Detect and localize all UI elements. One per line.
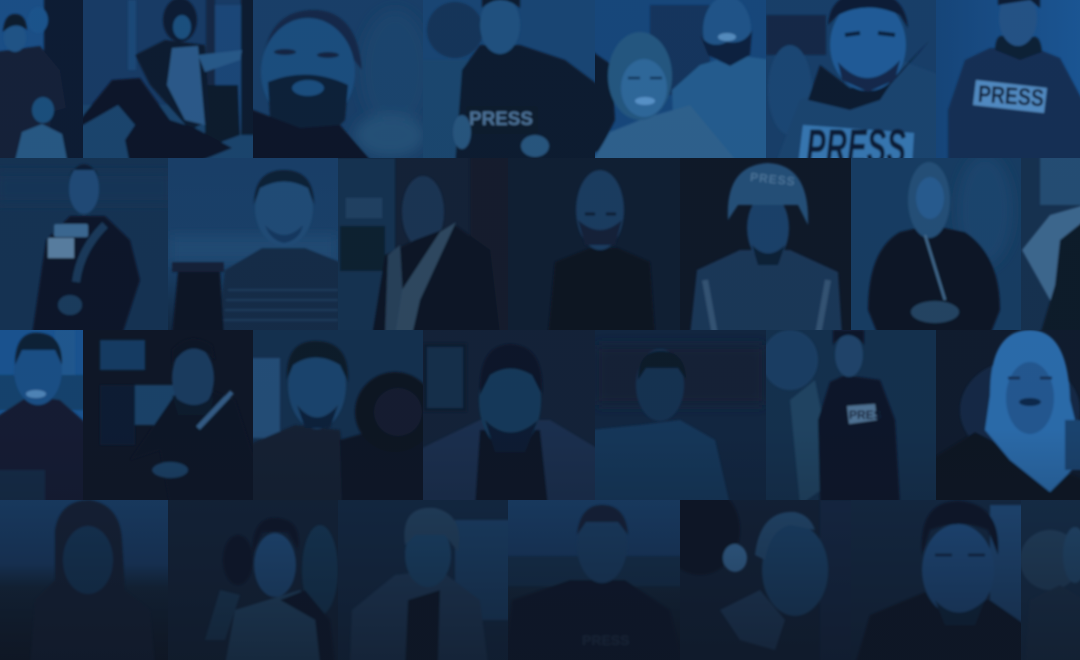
portrait: cropped group: [1020, 500, 1080, 660]
portrait: journalist with PRESS vest: PRESS: [806, 119, 906, 175]
portrait: man with boy: [0, 0, 83, 158]
portrait: man with keffiyeh: [335, 155, 512, 335]
portrait: man holding PRESS vest: PRESS: [469, 109, 533, 130]
portrait: journalist in PRESS shirt: PRESS: [977, 81, 1045, 112]
portrait: smiling couple: [595, 0, 766, 158]
portrait: close-up man with cap: [253, 0, 423, 158]
portrait: bald man in dark sweater: [508, 158, 680, 335]
portrait: musician with guitar: [83, 0, 253, 158]
portrait: smiling cameraman: [0, 330, 88, 505]
portrait: journalist in tactical vest: [762, 330, 936, 505]
portrait: man beside camera lens: [253, 330, 423, 500]
portrait: man in blazer: [418, 330, 600, 505]
portrait: man with striped shirt and tripod: [168, 158, 340, 335]
portrait: man with press vest at a camp: [508, 500, 680, 645]
portrait: man looking down: [338, 500, 510, 660]
portrait: smiling woman in white hijab: [936, 330, 1080, 494]
portrait: field reporter with microphone: [0, 158, 173, 335]
portrait: man with press vest at a camp: PRESS: [582, 632, 629, 648]
portrait: journalist with PRESS vest: [766, 0, 936, 158]
portrait: journalist with PRESS helmet: [689, 162, 843, 330]
portrait: man holding small disc: [680, 500, 851, 660]
portrait: young man smiling: [851, 500, 1026, 660]
portrait: man with broadcast camera: [98, 338, 235, 480]
portrait: man holding PRESS vest: [423, 0, 595, 158]
portrait: woman in hijab with lanyard: [851, 155, 1021, 335]
portrait: journalist in PRESS shirt: [936, 0, 1080, 165]
portrait: man in grey sweater: [590, 330, 766, 505]
portrait: woman with long hair: [0, 500, 168, 621]
portrait: journalist in tactical vest: PRES: [849, 408, 882, 422]
portrait: journalist with PRESS helmet: PRESS: [749, 170, 796, 189]
portrait: cropped figure: [1021, 155, 1080, 335]
portrait: young photographer with camera: [168, 500, 338, 660]
